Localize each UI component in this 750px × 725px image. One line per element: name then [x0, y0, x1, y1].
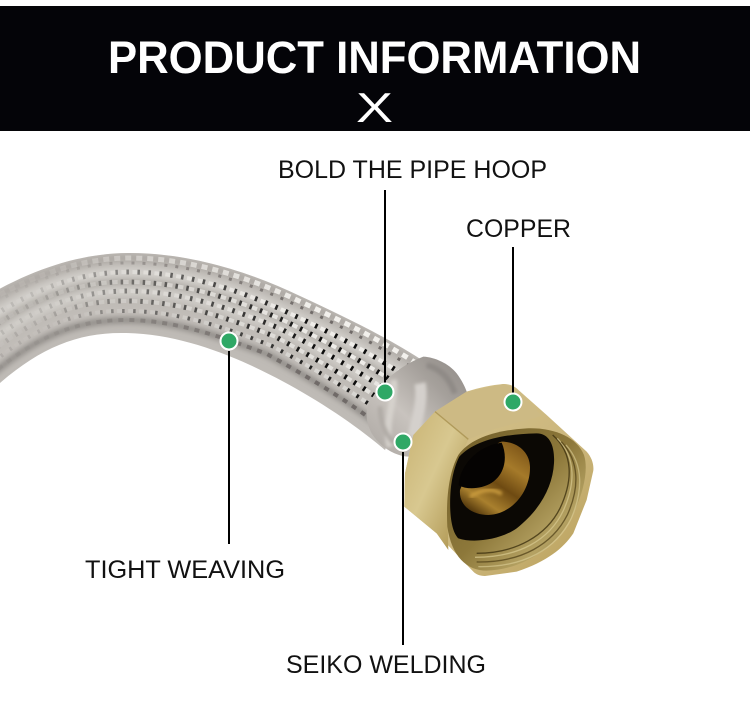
callout: copper	[466, 215, 571, 410]
braided steel hose	[0, 253, 420, 450]
thread rim	[447, 428, 586, 571]
nut silhouette	[404, 384, 593, 576]
callout: bold the pipe hoop: BOLD THE PIPE HOOP	[278, 156, 547, 184]
header band	[0, 6, 750, 131]
thread lines	[475, 435, 580, 567]
callout: seiko welding	[286, 434, 486, 679]
inner copper tube	[460, 442, 530, 515]
callout: bold the pipe hoop	[278, 156, 547, 400]
callout: tight weaving: TIGHT WEAVING	[85, 556, 285, 584]
inner bore	[459, 443, 505, 488]
left face	[404, 412, 468, 550]
icon: X mark: X	[356, 84, 393, 131]
callout: copper: COPPER	[466, 215, 571, 243]
top face highlight	[435, 384, 542, 439]
dark interior	[450, 433, 554, 541]
brass hex nut	[404, 384, 593, 576]
callout: tight weaving	[85, 332, 285, 584]
callout: seiko welding: SEIKO WELDING	[286, 651, 486, 679]
crimped steel collar	[367, 357, 467, 457]
title: PRODUCT INFORMATION	[108, 32, 641, 83]
